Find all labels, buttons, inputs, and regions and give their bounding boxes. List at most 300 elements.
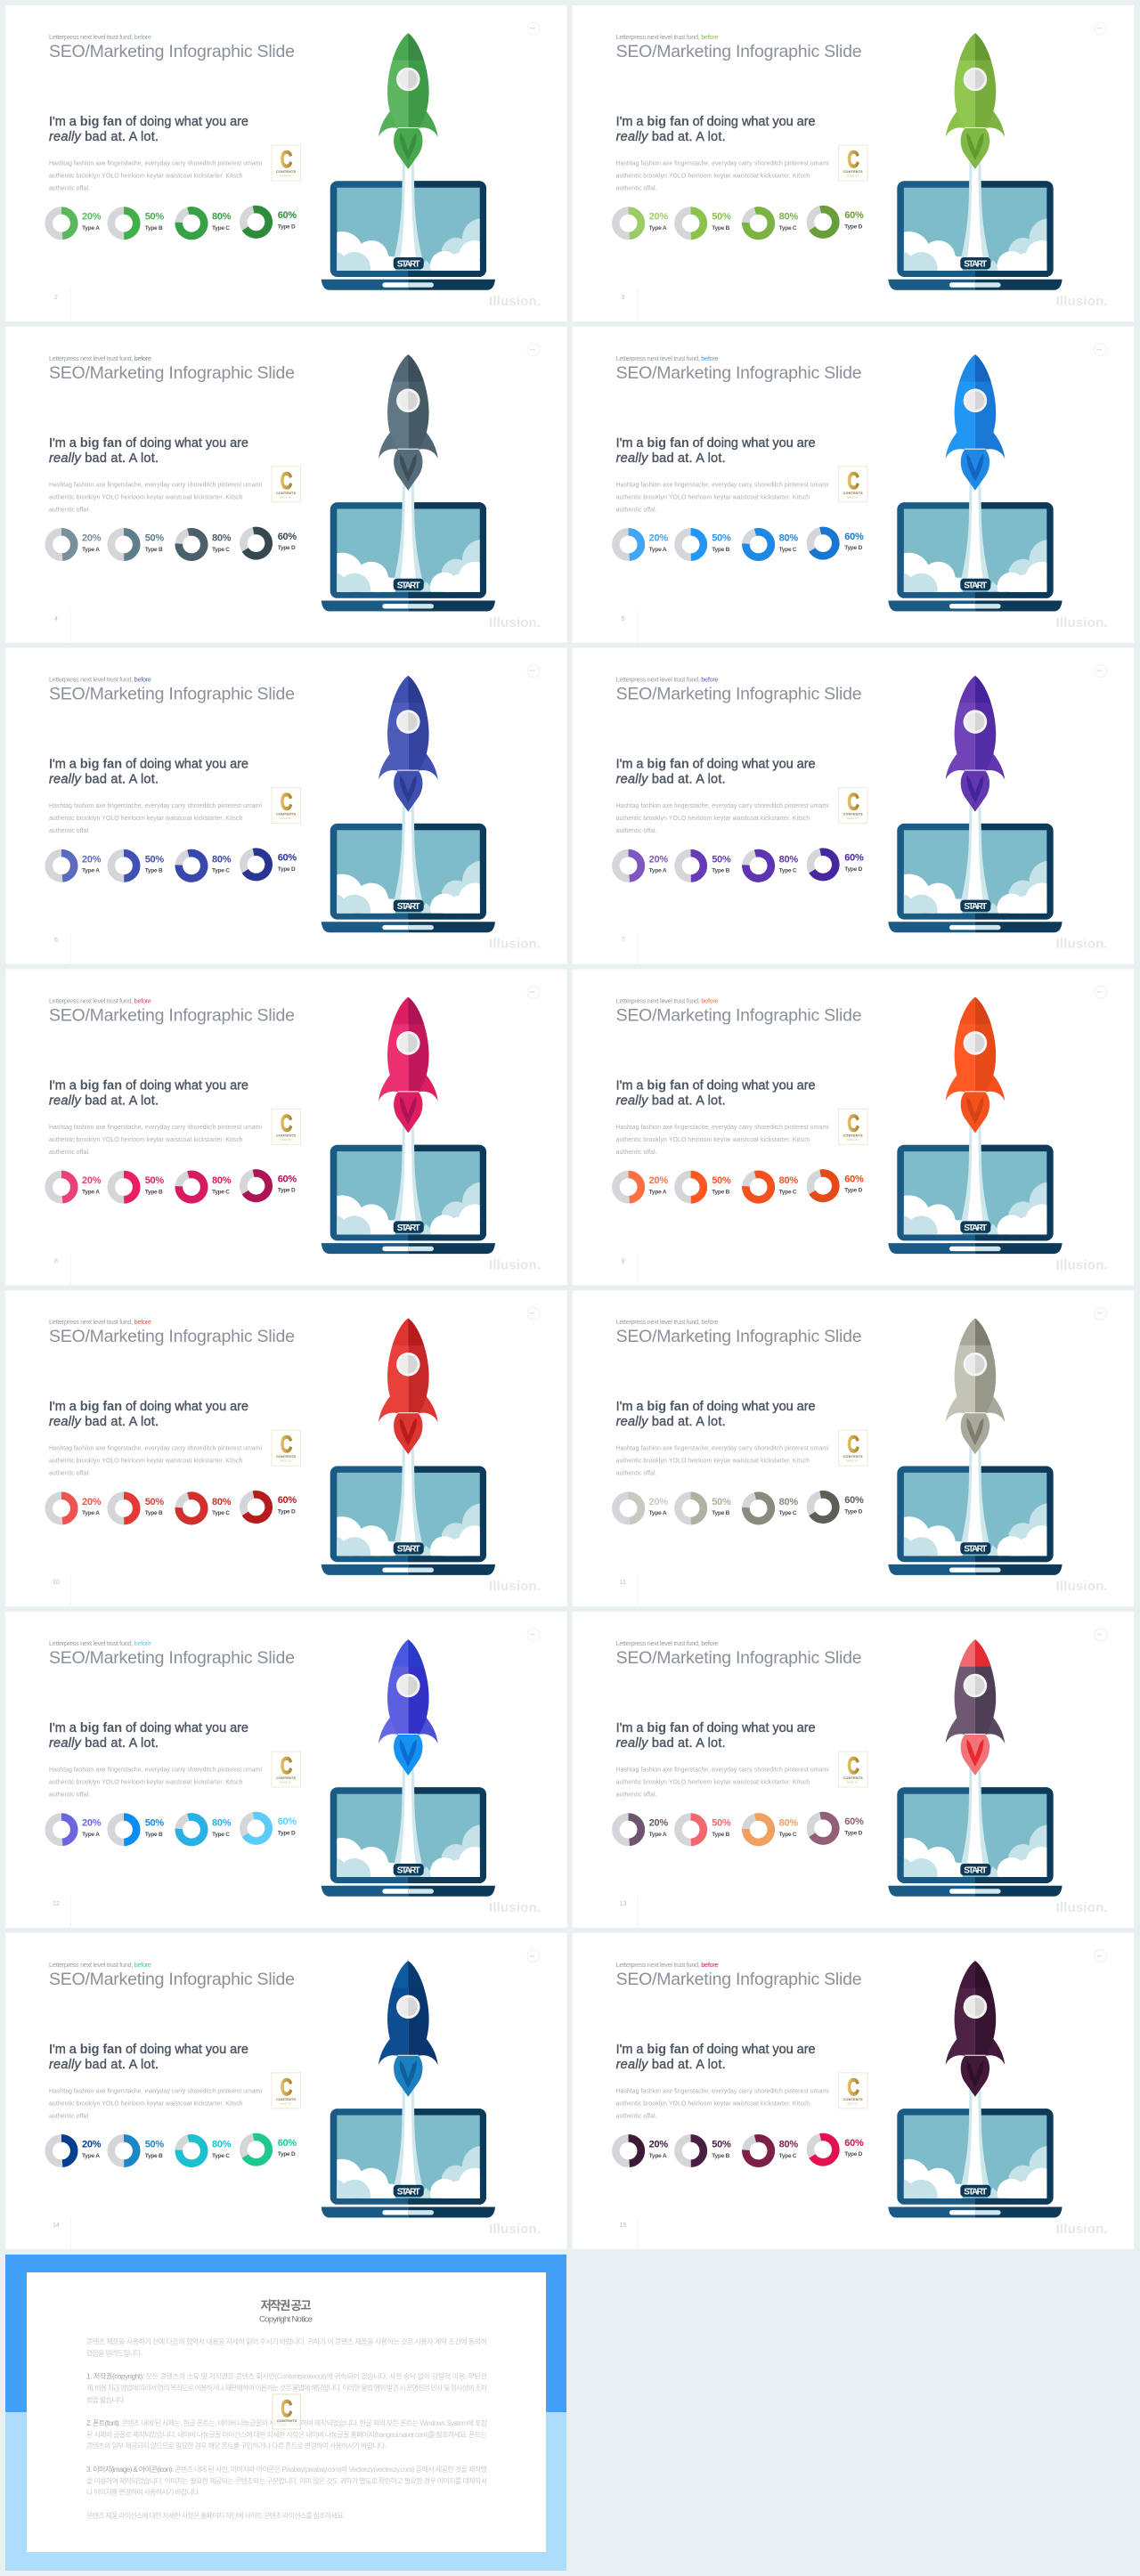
logo stamp xyxy=(839,467,867,502)
donut: Type A 20% xyxy=(49,1496,102,1521)
logo stamp xyxy=(272,145,301,181)
donut: Type C 80%: Type C xyxy=(779,868,797,874)
donut: Type A 20% xyxy=(615,2138,668,2164)
start button: START xyxy=(964,1223,987,1233)
donut: Type C 80%: 80% xyxy=(779,1497,798,1507)
donut: Type C 80% xyxy=(176,1814,232,1845)
logo stamp: C xyxy=(281,146,292,173)
body text: authentic brooklyn YOLO heirloom keytar waistcoat kickstarter. Kitsch xyxy=(616,2101,810,2107)
donut: Type B 50%: 50% xyxy=(145,854,164,865)
donut: Type A 20% xyxy=(615,210,668,236)
donut: Type B 50% xyxy=(111,2138,164,2164)
donut: Type D 60%: 60% xyxy=(278,1174,297,1184)
donut: Type B 50% xyxy=(111,853,164,878)
title: SEO/Marketing Infographic Slide xyxy=(616,1327,862,1346)
body text: authentic offal. xyxy=(49,507,90,513)
donut: Type B 50% xyxy=(678,853,731,878)
donut: Type B 50% xyxy=(111,1816,164,1842)
rocket xyxy=(946,676,1005,812)
page number: 14 xyxy=(53,2223,60,2229)
donut: Type A 20%: 20% xyxy=(649,212,668,223)
menu icon xyxy=(527,1950,540,1962)
donut: Type A 20% xyxy=(615,532,668,557)
donut: Type C 80%: Type C xyxy=(212,2153,230,2159)
donut: Type C 80% xyxy=(743,1172,798,1202)
logo stamp: CONTENTS xyxy=(277,2419,297,2423)
logo stamp xyxy=(272,467,301,502)
donut: Type C 80%: 80% xyxy=(212,212,232,223)
title: SEO/Marketing Infographic Slide xyxy=(49,363,295,383)
title: SEO/Marketing Infographic Slide xyxy=(616,363,862,383)
body text: authentic offal. xyxy=(49,828,90,834)
laptop illustration xyxy=(888,1759,1071,1897)
laptop illustration xyxy=(888,152,1071,290)
donut: Type D 60% xyxy=(241,1492,297,1522)
donut: Type D 60%: 60% xyxy=(844,1495,864,1506)
slide background xyxy=(5,5,566,321)
slide background xyxy=(5,327,566,643)
body text: authentic offal. xyxy=(49,1471,90,1477)
rocket xyxy=(379,676,438,812)
rocket xyxy=(946,1639,1005,1776)
body text: authentic brooklyn YOLO heirloom keytar waistcoat kickstarter. Kitsch xyxy=(616,494,810,500)
menu icon: ••• xyxy=(1096,1954,1102,1960)
donut: Type C 80% xyxy=(176,529,232,560)
body text: authentic offal. xyxy=(49,2113,90,2119)
start button xyxy=(960,1221,990,1233)
brand wordmark: Illusion. xyxy=(1056,1257,1108,1272)
donut: Type D 60%: Type D xyxy=(278,1508,296,1515)
donut: Type D 60%: Type D xyxy=(844,1830,863,1836)
page number xyxy=(54,289,71,321)
heading: I'm a big fan of doing what you are xyxy=(49,2043,248,2057)
slide background xyxy=(5,1290,566,1606)
logo stamp: CONTENTS xyxy=(276,813,296,817)
start button xyxy=(394,2185,424,2197)
white notice card xyxy=(27,2272,546,2552)
body text xyxy=(616,1446,829,1477)
notice section 1: 법을 밟습니다. xyxy=(86,2395,126,2404)
body text: authentic offal. xyxy=(49,185,90,192)
logo stamp: CONTENTS xyxy=(276,2098,296,2101)
heading: really bad at. A lot. xyxy=(49,773,159,787)
start button: START xyxy=(397,1223,420,1233)
slide background xyxy=(5,1933,566,2249)
body text xyxy=(49,1125,262,1156)
donut: Type A 20%: 20% xyxy=(649,1175,668,1186)
page number xyxy=(620,1574,639,1606)
title: SEO/Marketing Infographic Slide xyxy=(616,1648,862,1668)
donut: Type D 60% xyxy=(808,2134,864,2165)
logo stamp xyxy=(839,1430,867,1466)
title: SEO/Marketing Infographic Slide xyxy=(616,685,862,704)
heading xyxy=(616,1721,816,1751)
donut: Type B 50%: Type B xyxy=(712,1189,730,1195)
laptop illustration xyxy=(321,1116,503,1254)
donut: Type A 20%: 20% xyxy=(649,1497,668,1507)
page number xyxy=(54,932,71,964)
heading: I'm a big fan of doing what you are xyxy=(49,758,248,772)
donut: Type B 50% xyxy=(678,1496,731,1521)
page number xyxy=(622,1253,639,1285)
rocket xyxy=(379,1639,438,1776)
donut: Type C 80%: Type C xyxy=(779,225,797,232)
heading: I'm a big fan of doing what you are xyxy=(49,1078,248,1093)
heading: really bad at. A lot. xyxy=(616,1415,726,1429)
menu icon: ••• xyxy=(529,1633,535,1638)
donut: Type C 80%: 80% xyxy=(779,1818,798,1829)
donut: Type B 50% xyxy=(678,2138,731,2164)
logo stamp: CONTENTS xyxy=(843,1776,863,1780)
donut: Type D 60% xyxy=(241,1171,297,1201)
menu icon xyxy=(527,986,540,998)
slide background xyxy=(573,648,1134,964)
page number xyxy=(54,1253,71,1285)
donut: Type C 80% xyxy=(176,1172,232,1202)
menu icon: ••• xyxy=(1096,27,1102,32)
donut: Type D 60% xyxy=(808,1492,864,1522)
menu icon xyxy=(1095,1629,1107,1641)
notice section 2: 2. 폰트(font): 콘텐츠 내에 된 서체는, 한글 폰트는, 네이버 나눔글꼴의 서체를 사용하여 제작되었습니다. 한글 외의 모든 폰트는 Windows System에 포함 xyxy=(86,2418,488,2427)
donut: Type D 60% xyxy=(241,528,297,558)
body text: authentic brooklyn YOLO heirloom keytar waistcoat kickstarter. Kitsch xyxy=(49,1779,243,1786)
donut: Type C 80%: Type C xyxy=(212,547,230,553)
donut: Type D 60%: Type D xyxy=(844,866,863,873)
menu icon: ••• xyxy=(1096,348,1102,353)
logo stamp: MADE BY xyxy=(847,2101,859,2105)
donut: Type C 80%: 80% xyxy=(212,854,232,865)
logo stamp: MADE BY xyxy=(280,817,292,820)
donut: Type C 80%: Type C xyxy=(779,1832,797,1838)
donut: Type A 20%: 20% xyxy=(82,854,102,865)
donut: Type D 60%: 60% xyxy=(278,2138,297,2149)
laptop illustration xyxy=(321,795,503,932)
body text: authentic brooklyn YOLO heirloom keytar waistcoat kickstarter. Kitsch xyxy=(49,1459,243,1465)
donut: Type D 60%: Type D xyxy=(844,2151,863,2158)
donut: Type D 60%: Type D xyxy=(278,866,296,873)
body text: authentic brooklyn YOLO heirloom keytar waistcoat kickstarter. Kitsch xyxy=(49,173,243,180)
brand wordmark: Illusion. xyxy=(489,1257,541,1272)
page number: 12 xyxy=(53,1901,60,1907)
slide background xyxy=(573,5,1134,321)
slide background xyxy=(5,969,566,1285)
slide background xyxy=(573,969,1134,1285)
menu icon: ••• xyxy=(529,1954,535,1960)
page number: 15 xyxy=(620,2223,626,2229)
slide background xyxy=(5,1612,566,1928)
subtitle: Letterpress next level trust fund, before xyxy=(616,996,719,1004)
page number xyxy=(53,1896,71,1928)
body text xyxy=(49,1767,262,1799)
start button xyxy=(394,579,424,590)
donut: Type C 80%: Type C xyxy=(212,1832,230,1838)
body text: authentic offal. xyxy=(616,1792,657,1799)
notice intro: 콘텐츠 제품을 사용하기 전에 다음의 협약서 내용을 자세히 읽어 주시기 바랍니다. 귀하가 이 콘텐츠 제품을 사용하는 것은 사용자 계약 조건에 동의하 xyxy=(86,2337,488,2346)
start button xyxy=(394,1542,424,1555)
body text: authentic brooklyn YOLO heirloom keytar waistcoat kickstarter. Kitsch xyxy=(616,816,810,822)
donut: Type D 60% xyxy=(808,528,864,558)
page number: 3 xyxy=(622,295,625,301)
donut: Type A 20%: 20% xyxy=(649,1818,668,1829)
panel: slide 7 purple xyxy=(573,648,1134,964)
heading: really bad at. A lot. xyxy=(616,1736,726,1751)
heading: really bad at. A lot. xyxy=(49,451,159,466)
menu icon: ••• xyxy=(1096,1312,1102,1317)
start button xyxy=(394,900,424,912)
brand wordmark: Illusion. xyxy=(489,1900,541,1915)
donut: Type B 50%: 50% xyxy=(145,2140,164,2150)
donut: Type A 20% xyxy=(49,1174,102,1199)
slide background xyxy=(573,1290,1134,1606)
brand wordmark: Illusion. xyxy=(489,615,541,630)
donut: Type B 50% xyxy=(678,1174,731,1199)
menu icon: ••• xyxy=(529,670,535,675)
body text: authentic brooklyn YOLO heirloom keytar waistcoat kickstarter. Kitsch xyxy=(616,1137,810,1143)
panel: slide 6 indigo xyxy=(5,648,566,964)
logo stamp: CONTENTS xyxy=(276,1134,296,1137)
title: SEO/Marketing Infographic Slide xyxy=(616,1970,862,1989)
logo stamp: MADE BY xyxy=(280,495,292,499)
start button: START xyxy=(964,1545,987,1555)
body text: authentic offal. xyxy=(616,185,657,192)
body text: Hashtag fashion axe fingerstache, everyday carry shoreditch pinterest umami xyxy=(616,482,829,488)
heading: really bad at. A lot. xyxy=(49,130,159,144)
donut: Type A 20% xyxy=(615,1496,668,1521)
subtitle: Letterpress next level trust fund, before xyxy=(616,33,719,41)
donut: Type D 60% xyxy=(808,1171,864,1201)
body text: authentic offal. xyxy=(616,828,657,834)
heading: I'm a big fan of doing what you are xyxy=(616,1078,816,1093)
donut: Type C 80%: 80% xyxy=(779,212,798,223)
menu icon xyxy=(1095,1307,1107,1320)
donut: Type C 80%: 80% xyxy=(779,532,798,543)
heading xyxy=(616,758,816,787)
donut: Type B 50%: Type B xyxy=(145,547,163,553)
subtitle: Letterpress next level trust fund, before xyxy=(49,354,151,362)
subtitle: Letterpress next level trust fund, before xyxy=(616,354,719,362)
notice section 1 xyxy=(86,2371,487,2404)
body text xyxy=(616,2088,829,2119)
body text xyxy=(616,1125,829,1156)
panel: slide 10 red xyxy=(5,1290,566,1606)
body text: authentic offal. xyxy=(616,507,657,513)
logo stamp xyxy=(273,2394,301,2429)
panel: slide 4 slate xyxy=(5,327,566,643)
logo stamp: C xyxy=(847,2074,859,2101)
rocket xyxy=(946,33,1005,169)
laptop illustration xyxy=(321,1759,503,1897)
logo stamp: MADE BY xyxy=(847,1138,859,1142)
logo stamp: C xyxy=(281,1109,292,1136)
notice subtitle: Copyright Notice xyxy=(259,2315,313,2325)
page number: 8 xyxy=(54,1258,58,1264)
panel: slide 11 neutral xyxy=(573,1290,1134,1606)
light blue lower band xyxy=(5,2412,566,2571)
body text: authentic brooklyn YOLO heirloom keytar waistcoat kickstarter. Kitsch xyxy=(49,816,243,822)
heading: I'm a big fan of doing what you are xyxy=(49,436,248,451)
notice section 3: 3. 이미지(image) & 아이콘(icon): 콘텐츠 내에 된 사진, 이미지와 아이콘은 Pixabay(pixabay.com)와 Vecteezy(vecteezy.com) 등에서 제공한 것을 제작했 xyxy=(86,2465,488,2474)
menu icon: ••• xyxy=(529,1312,535,1317)
laptop illustration xyxy=(888,1116,1071,1254)
heading: I'm a big fan of doing what you are xyxy=(49,115,248,129)
heading: I'm a big fan of doing what you are xyxy=(49,1721,248,1735)
heading: really bad at. A lot. xyxy=(49,1093,159,1108)
logo stamp xyxy=(272,1751,301,1787)
notice intro: 였음을 알려드립니다. xyxy=(86,2348,142,2357)
body text: authentic offal. xyxy=(49,1150,90,1156)
donut: Type A 20%: Type A xyxy=(649,868,667,874)
menu icon xyxy=(527,665,540,678)
notice section 3: 나 이미지를 변경하여 사용하시기 바랍니다. xyxy=(86,2488,200,2497)
heading: I'm a big fan of doing what you are xyxy=(616,758,816,772)
donut: Type C 80%: Type C xyxy=(779,2153,797,2159)
body text: authentic offal. xyxy=(49,1792,90,1799)
page number: 6 xyxy=(54,938,58,944)
heading xyxy=(616,2043,816,2072)
panel: slide 5 blue xyxy=(573,327,1134,643)
panel: slide 9 orange xyxy=(573,969,1134,1285)
body text: Hashtag fashion axe fingerstache, everyday carry shoreditch pinterest umami xyxy=(49,1767,262,1774)
logo stamp: C xyxy=(281,2395,292,2422)
logo stamp: C xyxy=(847,1752,859,1779)
donut: Type C 80%: Type C xyxy=(779,547,797,553)
body text xyxy=(49,482,262,513)
panel: slide 3 lime xyxy=(573,5,1134,321)
heading: really bad at. A lot. xyxy=(616,1093,726,1108)
body text: authentic brooklyn YOLO heirloom keytar waistcoat kickstarter. Kitsch xyxy=(616,173,810,180)
body text: Hashtag fashion axe fingerstache, everyday carry shoreditch pinterest umami xyxy=(49,803,262,809)
donut: Type A 20% xyxy=(49,210,102,236)
heading: I'm a big fan of doing what you are xyxy=(616,436,816,451)
donut: Type A 20% xyxy=(615,1816,668,1842)
start button xyxy=(960,900,990,912)
page number: 13 xyxy=(620,1901,626,1907)
subtitle: Letterpress next level trust fund, before xyxy=(616,1318,719,1326)
start button: START xyxy=(964,581,987,590)
heading xyxy=(49,115,248,144)
panel: slide 14 navy and teal xyxy=(5,1933,566,2249)
panel: slide 2 green xyxy=(5,5,566,321)
body text: Hashtag fashion axe fingerstache, everyday carry shoreditch pinterest umami xyxy=(49,2088,262,2094)
heading xyxy=(616,1400,816,1429)
page number xyxy=(54,611,71,643)
heading xyxy=(49,2043,248,2072)
logo stamp: MADE BY xyxy=(847,817,859,820)
notice section 3: 을 이용하여 제작되었습니다. 이미지는 필요한 제공되는 콘텐츠와는 구분합니다. 이미 많은 것도 귀하가 별도로 확인하고 필요한 경우 이미지를 대체하셔 xyxy=(86,2476,487,2485)
donut: Type C 80%: 80% xyxy=(212,1818,232,1829)
donut: Type D 60%: Type D xyxy=(844,545,863,551)
donut: Type C 80% xyxy=(176,1493,232,1524)
menu icon xyxy=(527,22,540,35)
body text xyxy=(49,803,262,834)
menu icon xyxy=(1095,986,1107,998)
body text: Hashtag fashion axe fingerstache, everyday carry shoreditch pinterest umami xyxy=(616,160,829,167)
donut: Type B 50%: 50% xyxy=(712,1818,731,1829)
donut: Type D 60%: 60% xyxy=(278,853,297,864)
logo stamp: MADE BY xyxy=(280,175,292,178)
donut: Type A 20%: Type A xyxy=(649,1189,667,1195)
donut: Type C 80%: Type C xyxy=(779,1510,797,1516)
donut: Type D 60%: 60% xyxy=(278,532,297,542)
logo stamp: C xyxy=(281,1752,292,1779)
donut: Type C 80% xyxy=(743,1814,798,1845)
donut: Type B 50% xyxy=(111,1174,164,1199)
donut: Type B 50% xyxy=(111,1496,164,1521)
donut: Type A 20%: Type A xyxy=(649,1832,667,1838)
donut: Type C 80% xyxy=(743,1493,798,1524)
body text: Hashtag fashion axe fingerstache, everyday carry shoreditch pinterest umami xyxy=(616,2088,829,2094)
menu icon: ••• xyxy=(1096,990,1102,995)
menu icon xyxy=(1095,22,1107,35)
logo stamp: MADE BY xyxy=(847,175,859,178)
logo stamp: CONTENTS xyxy=(276,1455,296,1459)
heading: really bad at. A lot. xyxy=(49,2058,159,2072)
notice section 2: 콘텐츠의 일부 제공되지 않으므로 필요한 경우 해당 폰트를 구입하거나 다른 폰트로 변경하여 사용하시기 바랍니다. xyxy=(86,2442,387,2450)
notice section 3 xyxy=(86,2465,488,2497)
brand wordmark: Illusion. xyxy=(1056,615,1108,630)
start button xyxy=(960,2185,990,2197)
logo stamp: C xyxy=(847,146,859,173)
donut: Type C 80%: Type C xyxy=(212,868,230,874)
body text xyxy=(49,1446,262,1477)
start button: START xyxy=(397,581,420,590)
donut: Type B 50%: Type B xyxy=(712,2153,730,2159)
start button: START xyxy=(397,902,420,912)
heading: really bad at. A lot. xyxy=(49,1415,159,1429)
logo stamp xyxy=(839,1751,867,1787)
donut: Type D 60%: 60% xyxy=(844,532,864,542)
body text: Hashtag fashion axe fingerstache, everyday carry shoreditch pinterest umami xyxy=(49,482,262,488)
donut: Type C 80% xyxy=(743,207,798,239)
panel: slide 13 plum and coral xyxy=(573,1612,1134,1928)
donut: Type D 60% xyxy=(241,849,297,880)
donut: Type A 20%: Type A xyxy=(649,2153,667,2159)
slide background xyxy=(5,648,566,964)
menu icon: ••• xyxy=(529,990,535,995)
start button: START xyxy=(397,2187,420,2197)
heading: really bad at. A lot. xyxy=(49,1736,159,1751)
heading: really bad at. A lot. xyxy=(616,773,726,787)
body text: Hashtag fashion axe fingerstache, everyday carry shoreditch pinterest umami xyxy=(616,803,829,809)
rocket xyxy=(946,1318,1005,1454)
donut: Type A 20%: 20% xyxy=(82,1818,102,1829)
logo stamp xyxy=(272,1109,301,1144)
logo stamp: C xyxy=(847,789,859,816)
heading: I'm a big fan of doing what you are xyxy=(616,1400,816,1414)
laptop illustration xyxy=(321,1437,503,1575)
logo stamp: C xyxy=(281,467,292,494)
donut: Type D 60% xyxy=(241,2134,297,2165)
page number: 4 xyxy=(54,616,58,622)
donut: Type D 60%: 60% xyxy=(844,1816,864,1827)
subtitle: Letterpress next level trust fund, before xyxy=(616,676,719,684)
menu icon xyxy=(527,1307,540,1320)
page number xyxy=(620,2217,639,2249)
start button xyxy=(394,1221,424,1233)
start button xyxy=(960,1542,990,1555)
start button: START xyxy=(964,1866,987,1875)
logo stamp xyxy=(839,788,867,824)
donut: Type B 50%: Type B xyxy=(712,547,730,553)
logo stamp: C xyxy=(847,467,859,494)
donut: Type C 80%: 80% xyxy=(779,854,798,865)
title: SEO/Marketing Infographic Slide xyxy=(49,1327,295,1346)
menu icon: ••• xyxy=(529,348,535,353)
body text: authentic offal. xyxy=(616,2113,657,2119)
title: SEO/Marketing Infographic Slide xyxy=(616,42,862,61)
logo stamp: MADE BY xyxy=(847,1459,859,1463)
brand wordmark: Illusion. xyxy=(489,294,541,309)
